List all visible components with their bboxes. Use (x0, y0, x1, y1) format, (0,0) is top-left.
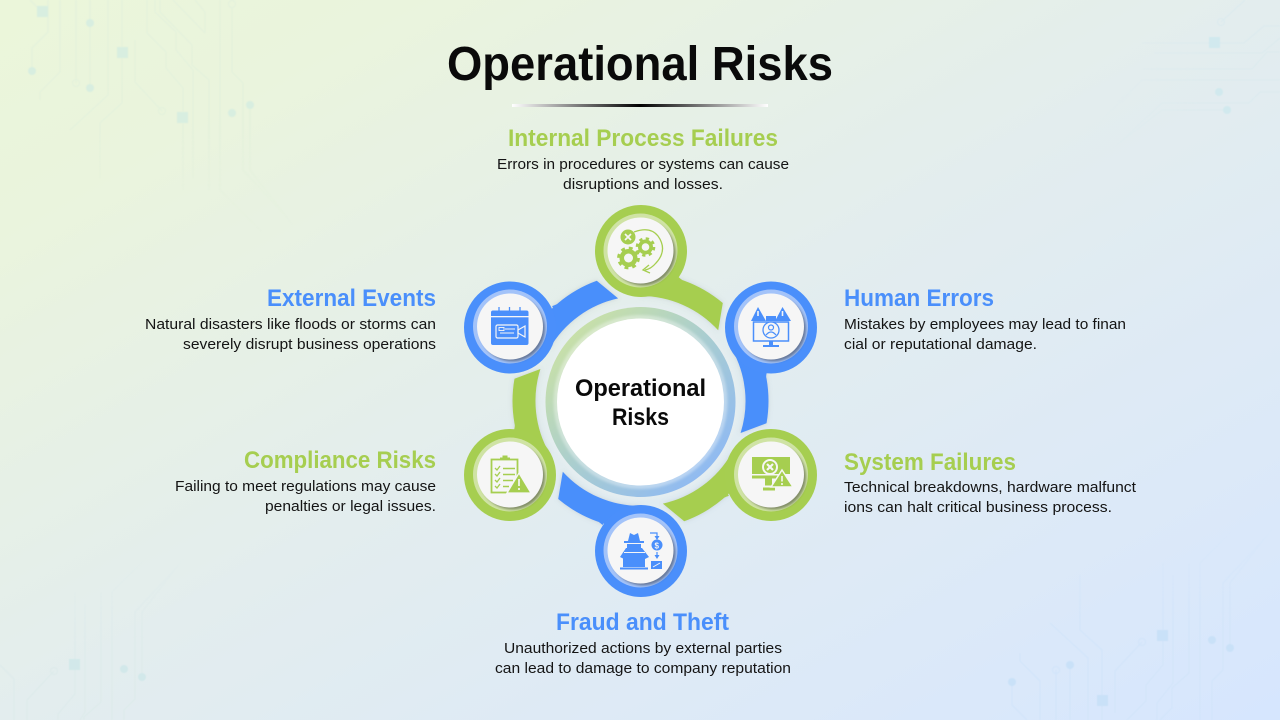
heading: External Events (267, 285, 436, 312)
ring segments (488, 266, 793, 536)
description: Technical breakdowns, hardware malfunct (844, 479, 1137, 496)
node: Fraud and Theft (595, 505, 687, 597)
description: Errors in procedures or systems can cause (497, 156, 789, 173)
description: severely disrupt business operations (183, 336, 436, 353)
description: Mistakes by employees may lead to finan (844, 316, 1126, 333)
title underline (512, 104, 768, 107)
icon: checklist with warning (492, 456, 531, 493)
panel: Human Errors (844, 285, 1126, 353)
description (844, 316, 1126, 353)
description: disruptions and losses. (563, 176, 723, 193)
heading: Compliance Risks (244, 447, 436, 474)
panel: External Events (145, 285, 436, 353)
description: penalties or legal issues. (265, 498, 436, 515)
node: Internal Process Failures (595, 205, 687, 297)
node: Human Errors (725, 282, 817, 374)
panel: Fraud and Theft (495, 609, 791, 677)
title: Operational Risks (447, 38, 833, 91)
background circuit pattern: bottom right (1008, 630, 1234, 706)
description: Unauthorized actions by external parties (504, 640, 782, 657)
icon: calendar with video camera (491, 307, 528, 345)
panel: Compliance Risks (175, 447, 436, 515)
description: ions can halt critical business process. (844, 499, 1112, 516)
description: Natural disasters like floods or storms can (145, 316, 436, 333)
node: System Failures (725, 429, 817, 521)
background circuit pattern: top left (28, 6, 254, 124)
description (844, 479, 1137, 516)
hub label (575, 375, 706, 431)
node: Compliance Risks (464, 429, 556, 521)
description: Failing to meet regulations may cause (175, 478, 436, 495)
central hub (542, 304, 738, 500)
description (497, 156, 789, 193)
icon: thief with laptop and money: $ (654, 542, 660, 550)
background circuit pattern: top right (1208, 37, 1231, 114)
icon: monitor with error and warning (752, 457, 793, 490)
icon: gears with arrow (618, 230, 663, 273)
heading: Internal Process Failures (508, 125, 778, 152)
node: External Events (464, 282, 556, 374)
hub label: Risks (612, 404, 669, 431)
description (175, 478, 436, 515)
icon: monitor with user and warnings (751, 307, 791, 347)
panel: Internal Process Failures (497, 125, 789, 193)
description: cial or reputational damage. (844, 336, 1037, 353)
hub label: Operational (575, 375, 706, 402)
heading: Fraud and Theft (556, 609, 729, 636)
description: can lead to damage to company reputation (495, 660, 791, 677)
heading: System Failures (844, 449, 1016, 476)
panel: System Failures (844, 449, 1137, 516)
description (495, 640, 791, 677)
heading: Human Errors (844, 285, 994, 312)
background circuit pattern: bottom left (69, 658, 146, 681)
description (145, 316, 436, 353)
